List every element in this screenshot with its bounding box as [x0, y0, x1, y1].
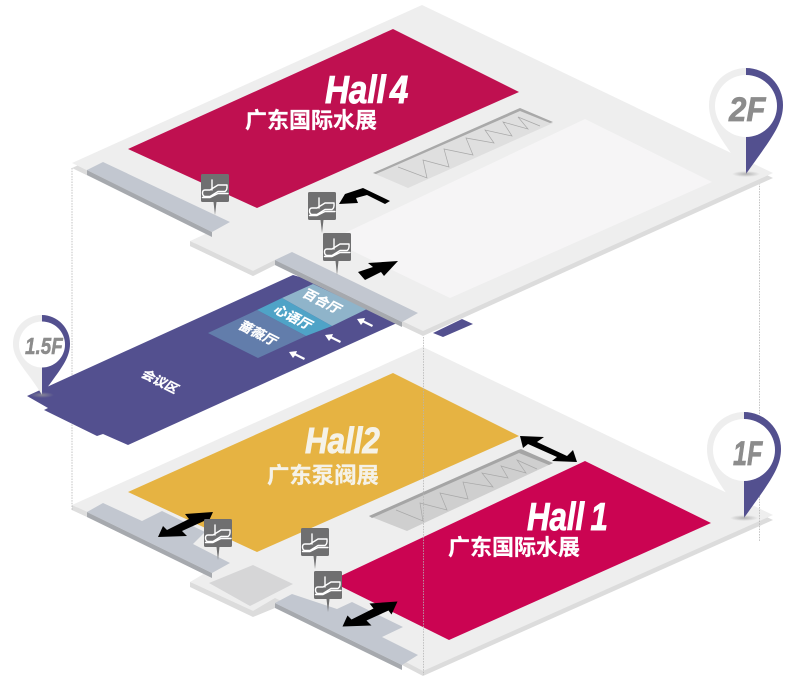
1.5F conference area	[27, 275, 473, 445]
1F marker	[707, 412, 781, 521]
Hall 2 title: Hall2	[305, 421, 380, 462]
arrow: Hall 2 to Hall 1	[520, 436, 577, 462]
Hall 1	[330, 461, 711, 640]
2F right strip	[275, 252, 418, 327]
Hall 4 title: Hall 4	[325, 67, 408, 112]
Hall 2 subtitle: 广东泵阀展	[267, 463, 379, 488]
icon: escalator pin 2F middle	[308, 192, 336, 233]
1F left entrance strip	[87, 503, 230, 578]
1.5F marker: 1.5F	[25, 334, 64, 359]
room: 蔷薇厅: 蔷薇厅	[236, 318, 282, 348]
white arrows	[289, 318, 373, 360]
icon: escalator pin 2F left	[201, 174, 229, 215]
2F marker	[709, 68, 783, 177]
arrow: to 2F area	[358, 261, 398, 280]
room: 百合厅	[282, 284, 367, 326]
2F marker: 2F	[728, 90, 766, 128]
1F floor	[72, 347, 773, 676]
Hall 2	[128, 373, 519, 552]
arrow: bent to Hall 4	[339, 188, 390, 204]
room: 百合厅: 百合厅	[300, 286, 346, 316]
room: 心语厅	[257, 298, 332, 336]
Hall 4	[128, 29, 519, 208]
2F escalator	[373, 108, 553, 188]
Hall 1 subtitle: 广东国际水展	[448, 535, 580, 560]
2F light exhibition area	[330, 119, 712, 298]
icon: escalator pin 1F middle	[301, 528, 329, 569]
arrow: Hall 2 entrance	[158, 512, 213, 537]
1F marker: 1F	[733, 435, 763, 473]
guide lines	[72, 168, 760, 675]
icon: escalator pin 1F left	[204, 519, 232, 560]
label: 会议区: 会议区	[138, 367, 183, 396]
2F floor	[72, 5, 773, 336]
1.5F marker	[13, 315, 70, 398]
room: 心语厅: 心语厅	[271, 303, 316, 332]
arrow: Hall 1 entrance	[342, 602, 398, 626]
icon: escalator pin 2F lower	[323, 233, 351, 275]
room: 蔷薇厅	[208, 310, 306, 358]
1F escalator	[369, 449, 553, 531]
Hall 1 title: Hall 1	[527, 496, 608, 539]
Hall 4 subtitle: 广东国际水展	[245, 108, 377, 133]
icon: escalator pin 1F lower	[314, 571, 342, 612]
2F left strip	[87, 162, 230, 237]
1F right entrance strip	[275, 594, 418, 670]
